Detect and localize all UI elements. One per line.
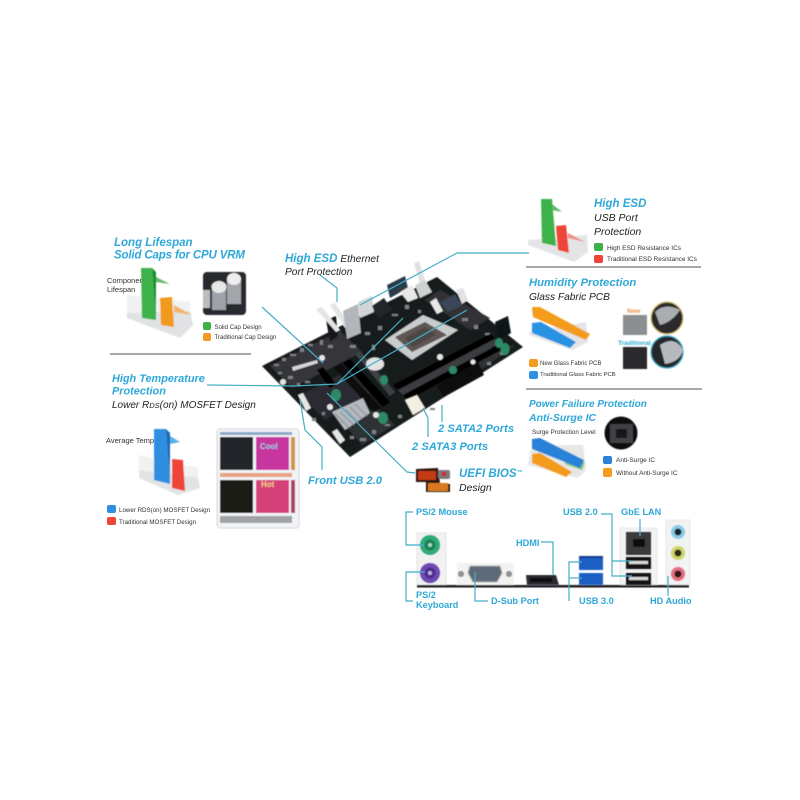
photo: solid capacitors bbox=[203, 272, 246, 315]
heading: high temperature: Protection bbox=[112, 386, 166, 398]
legend: MOSFET bbox=[107, 505, 211, 526]
chipset heatsink bbox=[332, 398, 370, 430]
divider: left panels bbox=[110, 353, 251, 355]
legend: glass fabric: Traditional Glass Fabric PCB bbox=[540, 372, 616, 378]
label: 2 SATA2 ports: 2 SATA2 Ports bbox=[437, 423, 514, 435]
icon: anti-surge chip bbox=[604, 416, 638, 450]
legend: surge: Anti-Surge IC bbox=[616, 457, 655, 464]
heading: high ESD USB: Protection bbox=[594, 226, 641, 238]
comparison: new fabric bbox=[623, 302, 683, 335]
panel: humidity protection bbox=[529, 277, 683, 379]
legend: glass fabric bbox=[529, 359, 616, 379]
thermal comparison card bbox=[217, 429, 299, 528]
thermal comparison card: Cool bbox=[260, 442, 278, 451]
port: USB 2.0 bbox=[626, 557, 651, 585]
heading: power failure: Anti-Surge IC bbox=[528, 412, 596, 424]
heading: long lifespan: Long Lifespan bbox=[114, 237, 193, 249]
legend: solid cap: Solid Cap Design bbox=[214, 324, 262, 331]
legend: solid cap bbox=[203, 322, 276, 341]
comparison: new fabric: New bbox=[627, 308, 641, 315]
I/O ports bbox=[316, 261, 468, 342]
capacitors bbox=[331, 338, 510, 424]
label: UEFI BIOS: UEFI BIOS bbox=[459, 468, 517, 480]
I/O leader lines bbox=[406, 512, 668, 601]
heading: humidity protection: Humidity Protection bbox=[529, 277, 636, 289]
legend: MOSFET: Lower RDS(on) MOSFET Design bbox=[119, 507, 211, 514]
panel: long lifespan bbox=[107, 237, 276, 341]
legend: surge bbox=[603, 456, 678, 477]
white rear connectors bbox=[280, 354, 476, 444]
legend: MOSFET: Traditional MOSFET Design bbox=[119, 519, 197, 526]
label: high ESD ethernet: Ethernet bbox=[340, 254, 380, 265]
label: UEFI BIOS: Design bbox=[459, 482, 492, 494]
legend: surge: Without Anti-Surge IC bbox=[616, 470, 678, 477]
comparison: traditional fabric: Traditional bbox=[618, 340, 651, 347]
label: front USB: Front USB 2.0 bbox=[308, 475, 383, 487]
label: USB 2.0: USB 2.0 bbox=[563, 507, 598, 517]
label: HD audio: HD Audio bbox=[650, 596, 692, 606]
icon: UEFI BIOS logo bbox=[416, 468, 450, 492]
SATA and 24-pin connectors bbox=[405, 362, 484, 415]
divider: right panel two bbox=[526, 388, 702, 390]
label: surge protection level: Surge Protection Level bbox=[532, 429, 596, 436]
label: GbE LAN: GbE LAN bbox=[621, 507, 662, 517]
chart: surge bars bbox=[528, 438, 586, 478]
I/O backplate silhouettes bbox=[417, 520, 690, 588]
label: component lifespan: Component bbox=[107, 276, 147, 285]
heading: power failure: Power Failure Protection bbox=[529, 399, 647, 410]
heading: high ESD USB: High ESD bbox=[594, 198, 646, 210]
silver CMOS battery bbox=[366, 358, 384, 370]
port: HDMI bbox=[526, 575, 559, 585]
power connector bbox=[495, 316, 511, 340]
bar chart: lifespan bbox=[127, 268, 193, 338]
CPU socket bbox=[385, 315, 458, 360]
heading: high temperature: High Temperature bbox=[112, 373, 205, 385]
motherboard bbox=[262, 261, 523, 457]
board PCB bbox=[262, 277, 523, 457]
divider: right panel one bbox=[526, 266, 701, 268]
heading: humidity protection: Glass Fabric PCB bbox=[529, 292, 610, 303]
heading: high ESD USB: USB Port bbox=[594, 212, 639, 224]
port: GbE LAN bbox=[626, 532, 651, 555]
label: PS/2 mouse: PS/2 Mouse bbox=[416, 507, 468, 517]
panel: rear I/O bbox=[406, 507, 692, 610]
legend: ESD: High ESD Resistance ICs bbox=[607, 245, 682, 252]
port: HD audio jacks bbox=[671, 525, 685, 581]
heading: high temperature: Lower R bbox=[112, 400, 149, 411]
port: PS/2 keyboard bbox=[420, 563, 440, 583]
label: high ESD ethernet: High ESD bbox=[285, 253, 337, 265]
panel: high ESD USB bbox=[528, 198, 697, 263]
label: D-Sub port: D-Sub Port bbox=[491, 596, 539, 606]
small board components bbox=[274, 305, 505, 441]
bar chart: ESD bbox=[528, 199, 588, 262]
label: USB 3.0: USB 3.0 bbox=[579, 596, 614, 606]
label: PS/2 keyboard: PS/2 bbox=[416, 590, 436, 600]
legend: solid cap: Traditional Cap Design bbox=[214, 334, 276, 341]
label: 2 SATA3 ports: 2 SATA3 Ports bbox=[411, 441, 488, 453]
panel: power failure protection bbox=[528, 399, 678, 478]
legend: ESD: Traditional ESD Resistance ICs bbox=[607, 256, 697, 263]
comparison: traditional fabric bbox=[618, 336, 683, 369]
label: high ESD ethernet: Port Protection bbox=[285, 267, 353, 278]
label: component lifespan: Lifespan bbox=[107, 285, 135, 294]
bar chart: temperature bbox=[139, 429, 200, 495]
legend: ESD bbox=[594, 243, 697, 263]
RAM slots bbox=[393, 334, 505, 400]
heading: long lifespan: Solid Caps for CPU VRM bbox=[114, 250, 245, 262]
heading: high temperature: DS(on) MOSFET Design bbox=[149, 400, 256, 411]
leader lines to motherboard bbox=[207, 253, 529, 473]
label: PS/2 keyboard: Keyboard bbox=[416, 600, 458, 610]
thermal comparison card: Hot bbox=[261, 480, 275, 489]
legend: glass fabric: New Glass Fabric PCB bbox=[540, 361, 601, 367]
panel: high temperature bbox=[106, 373, 299, 528]
label: average temp: Average Temp bbox=[106, 436, 154, 445]
board surface detail bbox=[270, 290, 515, 445]
label: HDMI: HDMI bbox=[516, 538, 539, 548]
label: UEFI BIOS: ™ bbox=[517, 469, 523, 476]
port: PS/2 mouse bbox=[420, 535, 440, 555]
chart: glass fabric bars bbox=[529, 307, 590, 350]
port: D-Sub bbox=[458, 566, 512, 582]
port: USB 3.0 bbox=[579, 556, 603, 585]
